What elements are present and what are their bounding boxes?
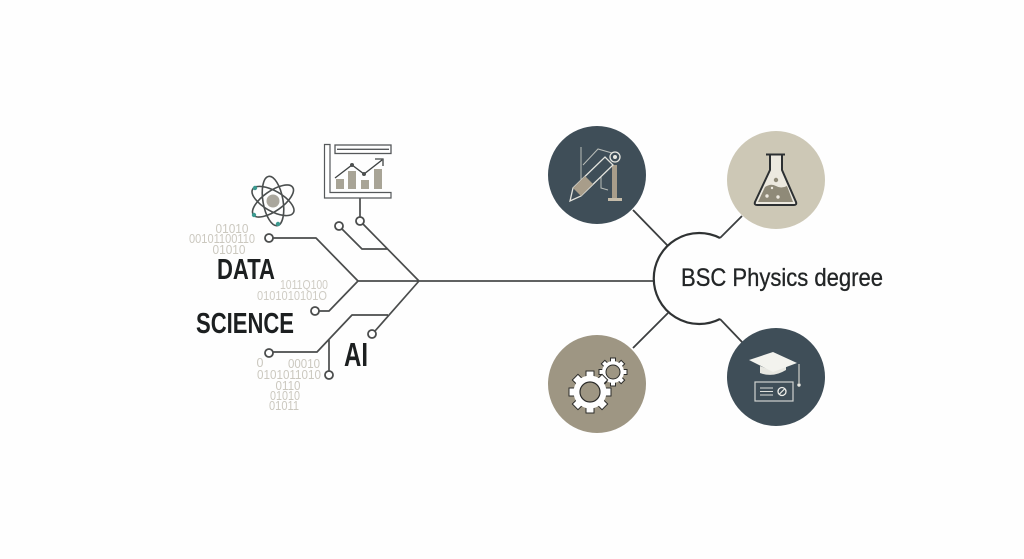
label: AI: AI [344,336,368,373]
icon circle: gears [548,335,646,433]
binary digits upper left: 01010 [212,243,246,257]
icon circle: flask [727,131,825,229]
icon: atom [248,175,298,227]
binary digits lower: 0101011010 [257,368,321,382]
binary digits lower: 0110 [276,379,301,393]
circuit trace network [265,198,655,379]
label: SCIENCE: SCIENCE [196,308,294,340]
icon: small gear [599,358,627,386]
label: DATA: DATA [217,254,275,286]
binary digits upper left [189,222,255,257]
central hub outline [654,233,720,324]
connector lines to icon circles [633,210,742,348]
icon: large gear [569,371,611,413]
icon circle: pen and instrument [548,126,646,224]
icon: bar chart board [324,144,391,198]
binary digits upper left: 00101100110 [189,232,255,246]
binary digits lower [257,356,321,413]
binary digits lower: 01011 [269,399,299,413]
binary digits middle: 1011Q100 [280,278,328,292]
binary digits upper left: 01010 [216,222,249,236]
icon circle: graduation cap and certificate [727,328,825,426]
binary digits lower: 0 [257,356,264,370]
binary digits lower: 01010 [270,389,300,403]
binary digits middle [257,278,328,303]
binary digits lower: 00010 [288,357,320,371]
binary digits middle: 0101010101O [257,289,327,303]
hub label: BSC Physics degree [681,264,883,292]
